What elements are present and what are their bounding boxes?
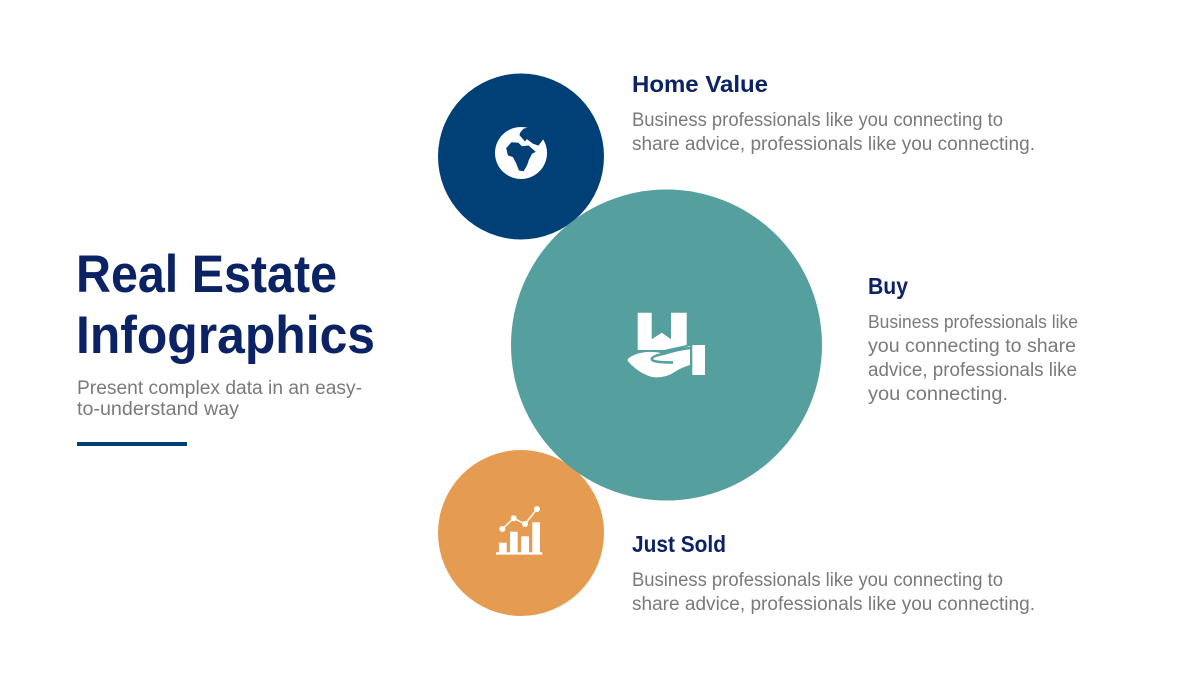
title: Infographics xyxy=(76,306,375,365)
text block: buy xyxy=(868,273,1078,405)
icon: bar chart with trend line xyxy=(496,506,542,555)
circle: buy xyxy=(511,190,822,500)
text block: home value: share advice, professionals like you connecting. xyxy=(632,134,1035,155)
title underline accent xyxy=(77,442,187,446)
subtitle text: Present complex data in an easy- xyxy=(77,378,362,399)
title xyxy=(76,245,375,365)
text block: buy: you connecting. xyxy=(868,384,1008,405)
text block: home value: Home Value xyxy=(632,71,768,97)
circle: just sold xyxy=(438,450,604,616)
subtitle text xyxy=(77,378,362,420)
text block: buy: Business professionals like xyxy=(868,312,1078,332)
text block: just sold: Just Sold xyxy=(632,531,726,557)
icon: hand holding house xyxy=(628,313,705,377)
text block: home value: Business professionals like you connecting to xyxy=(632,110,1003,131)
text block: just sold: Business professionals like you connecting to xyxy=(632,570,1003,591)
subtitle text: to-understand way xyxy=(77,399,240,420)
icon: globe xyxy=(495,127,549,179)
text block: home value xyxy=(632,71,1035,155)
text block: just sold: share advice, professionals like you connecting. xyxy=(632,594,1035,615)
text block: just sold xyxy=(632,531,1035,615)
text block: buy: advice, professionals like xyxy=(868,360,1077,381)
circle: home value xyxy=(438,74,604,240)
text block: buy: you connecting to share xyxy=(868,336,1076,357)
text block: buy: Buy xyxy=(868,273,908,299)
title: Real Estate xyxy=(76,245,337,304)
